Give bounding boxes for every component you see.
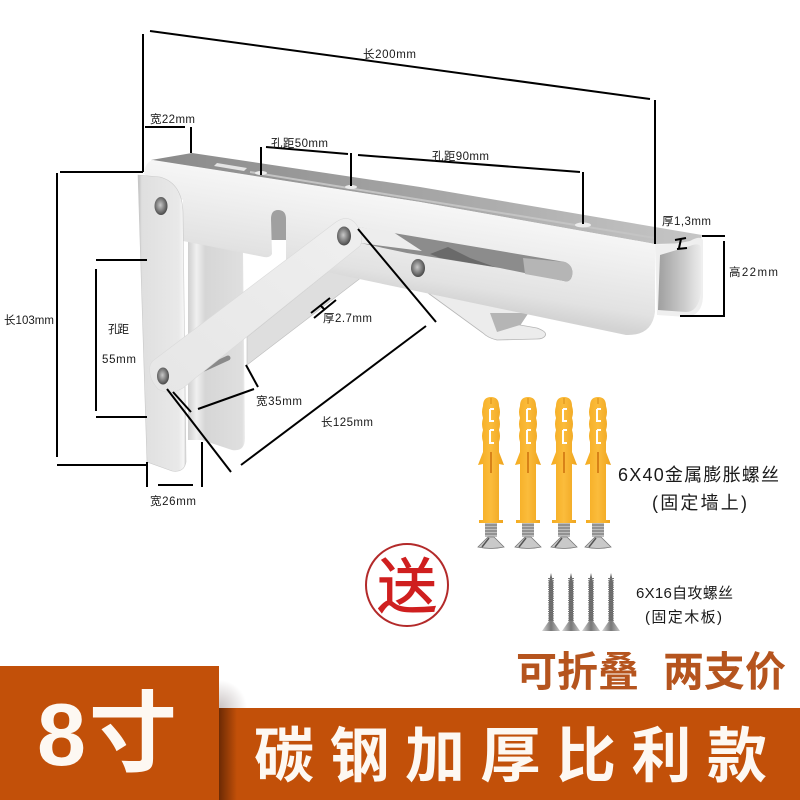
slot interior gray (271, 208, 287, 240)
product name: 碳钢加厚比利款 (254, 708, 782, 795)
dimension labels: 宽22mm (150, 112, 195, 126)
dimension labels: 长200mm (363, 48, 416, 61)
arm long slot (358, 227, 572, 281)
back plate (188, 236, 245, 450)
lower edge of diagonal brace (247, 262, 362, 365)
tagline (516, 649, 786, 695)
folding hook (428, 293, 546, 340)
dimension labels: 长125mm (321, 416, 373, 429)
arm top face (151, 153, 702, 244)
dimension labels (4, 48, 778, 508)
anchor caption: 6X40金属膨胀螺丝 (618, 465, 779, 485)
vertical wall plate (138, 175, 186, 471)
dimension labels: 厚2.7mm (323, 312, 372, 325)
dimension labels: 孔距50mm (271, 137, 328, 150)
size label: 8 (37, 685, 86, 784)
dimension labels: 孔距90mm (432, 150, 489, 163)
dimension labels: 孔距 (108, 323, 130, 336)
dimension labels: 长103mm (4, 314, 54, 327)
arm front face (144, 160, 655, 335)
icon: wood screws (542, 573, 620, 631)
screw caption: 6X16自攻螺丝 (636, 585, 733, 602)
dimension labels: 宽26mm (150, 494, 196, 508)
rivets (154, 197, 425, 384)
icon: gift stamp: 送 (377, 539, 437, 626)
screw caption (636, 585, 733, 626)
dimension labels: 高22mm (729, 265, 778, 279)
icon: yellow expansion anchors (478, 397, 611, 548)
diagonal brace (150, 218, 362, 392)
expansion pin (204, 358, 228, 369)
dimension labels: 55mm (102, 354, 136, 366)
anchor caption: (固定墙上) (652, 493, 747, 513)
tagline: 可折叠 (516, 649, 639, 695)
channel end (655, 238, 703, 317)
dimension lines (57, 31, 725, 487)
dimension labels: 宽35mm (256, 394, 302, 408)
bracket product illustration (138, 153, 703, 471)
anchor caption (618, 465, 779, 513)
size label (37, 684, 177, 784)
tagline: 两支价 (663, 649, 786, 695)
dimension labels: 厚1,3mm (662, 215, 711, 228)
size label: 寸 (89, 684, 177, 783)
bottom title band (0, 666, 800, 800)
screw caption: (固定木板) (645, 608, 722, 626)
